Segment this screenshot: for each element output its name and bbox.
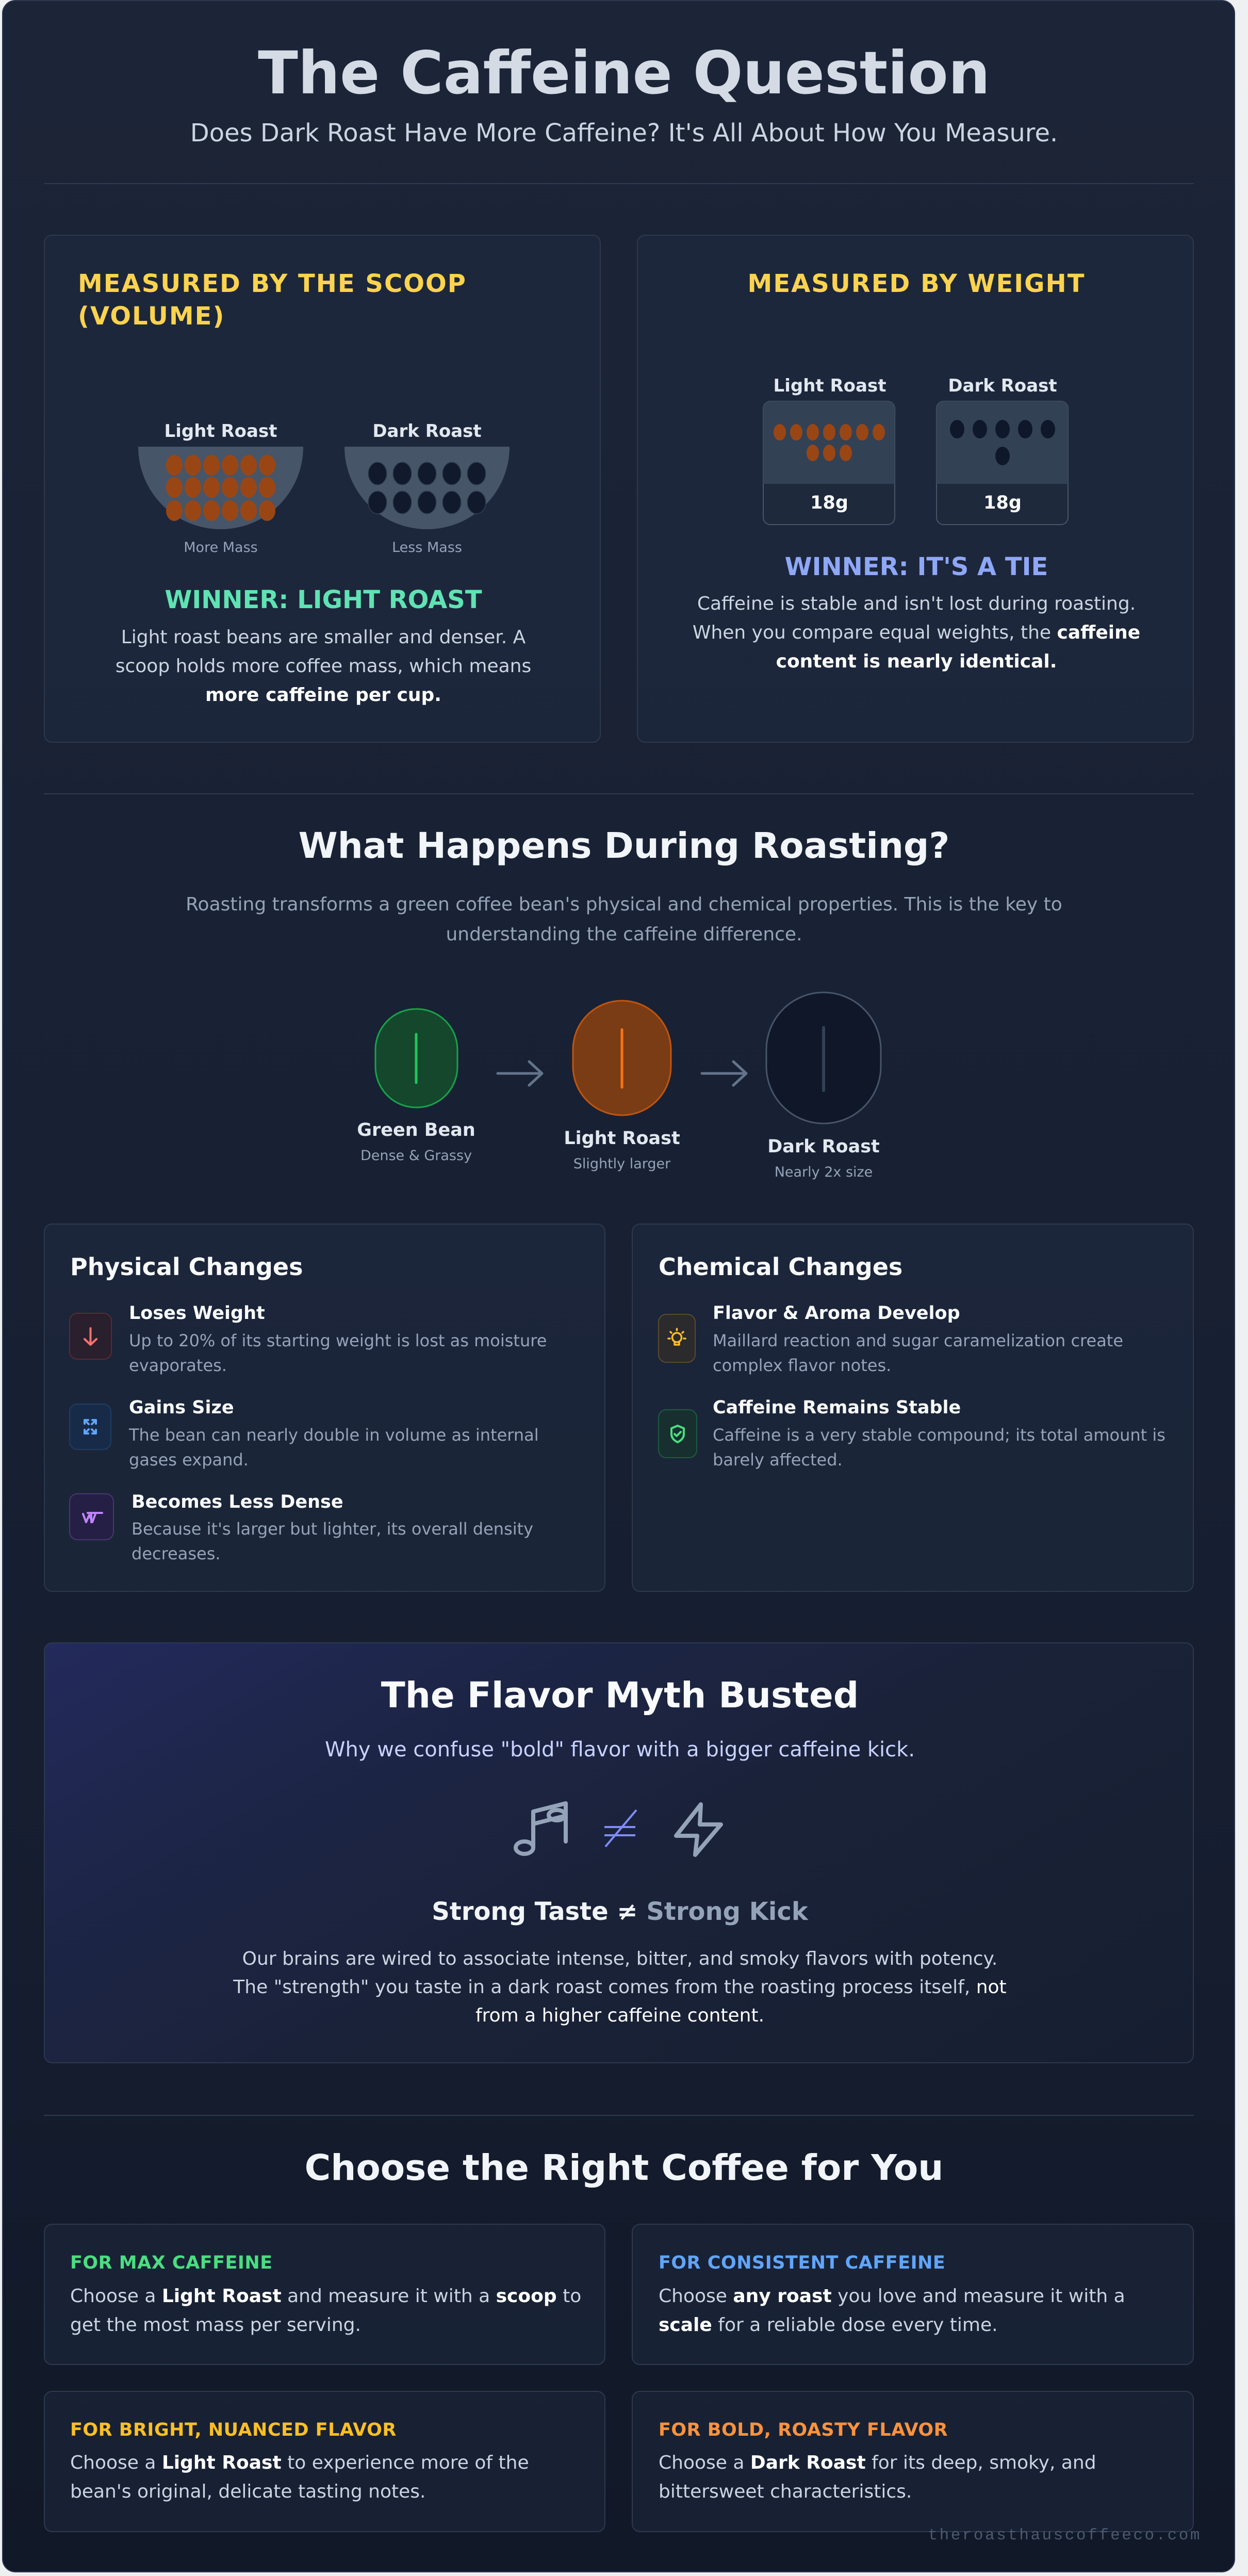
heading: weight: MEASURED BY WEIGHT bbox=[748, 269, 1085, 298]
card: bold flavor: FOR BOLD, ROASTY FLAVOR bbox=[659, 2420, 948, 2440]
weight boxes bbox=[763, 376, 1069, 525]
card: max caffeine bbox=[44, 2224, 605, 2365]
weight boxes: 18g bbox=[983, 493, 1022, 513]
panel: measured by scoop bbox=[44, 235, 601, 743]
arrow bbox=[498, 1062, 542, 1085]
arrow bbox=[702, 1062, 746, 1085]
scoop illustration: Less Mass bbox=[392, 540, 462, 556]
icon: shield bbox=[658, 1409, 697, 1458]
item: caffeine stable bbox=[658, 1397, 1165, 1470]
title: The Caffeine Question bbox=[258, 39, 990, 107]
item: flavor & aroma: Maillard reaction and sugar caramelization create complex flavor notes. bbox=[713, 1331, 1123, 1375]
icon: not equal bbox=[604, 1810, 636, 1847]
explanation: Our brains are wired to associate intense, bitter, and smoky flavors with potency. bbox=[242, 1948, 997, 1969]
explanation text: Caffeine is stable and isn't lost during roasting. When you compare equal weights, the caffeine content is nearly identical. bbox=[693, 593, 1140, 672]
light roast bean: Slightly larger bbox=[573, 1156, 671, 1172]
winner: light roast: WINNER: LIGHT ROAST bbox=[165, 585, 482, 614]
explanation text: Light roast beans are smaller and denser. A scoop holds more coffee mass, which means more caffeine per cup. bbox=[116, 627, 531, 706]
weight boxes: Light Roast bbox=[774, 376, 886, 396]
winner: tie: WINNER: IT'S A TIE bbox=[785, 552, 1048, 581]
card: bold flavor: Choose a Dark Roast for its deep, smoky, and bittersweet characteristics. bbox=[659, 2452, 1096, 2502]
heading: Chemical Changes bbox=[659, 1253, 902, 1281]
light roast bean bbox=[564, 1001, 680, 1172]
panel: physical changes bbox=[44, 1224, 605, 1592]
dark roast bean: Dark Roast bbox=[767, 1136, 880, 1157]
panel: chemical changes bbox=[632, 1224, 1194, 1592]
light roast bean: Light Roast bbox=[564, 1128, 680, 1149]
item: loses weight: Loses Weight bbox=[129, 1303, 265, 1324]
card: consistent caffeine: FOR CONSISTENT CAFFEINE bbox=[659, 2253, 945, 2273]
scoop illustration: More Mass bbox=[184, 540, 258, 556]
item: gains size: The bean can nearly double in volume as internal gases expand. bbox=[129, 1425, 539, 1470]
card: max caffeine: Choose a Light Roast and measure it with a scoop to get the most mass per serving. bbox=[70, 2286, 581, 2336]
panel: measured by weight bbox=[637, 235, 1194, 743]
footer url: theroasthauscoffeeco.com bbox=[928, 2526, 1202, 2545]
icon: music note bbox=[516, 1803, 566, 1854]
dark roast bean bbox=[766, 992, 881, 1180]
heading: choose: Choose the Right Coffee for You bbox=[305, 2147, 943, 2189]
heading: Physical Changes bbox=[70, 1253, 303, 1281]
scoop illustration bbox=[138, 421, 510, 556]
subtitle: Does Dark Roast Have More Caffeine? It's All About How You Measure. bbox=[190, 119, 1058, 148]
bean transformation diagram bbox=[357, 991, 882, 1180]
icon: arrow down bbox=[69, 1313, 112, 1360]
card: consistent caffeine bbox=[632, 2224, 1194, 2365]
item: caffeine stable: Caffeine is a very stable compound; its total amount is barely affected. bbox=[713, 1425, 1165, 1470]
roasting intro text: Roasting transforms a green coffee bean's physical and chemical properties. This is the key to understanding the caffeine difference. bbox=[186, 894, 1062, 945]
panel: flavor myth bbox=[44, 1642, 1194, 2063]
item: less dense: Becomes Less Dense bbox=[132, 1492, 343, 1512]
item: gains size: Gains Size bbox=[129, 1397, 234, 1418]
subheading: Why we confuse "bold" flavor with a bigger caffeine kick. bbox=[325, 1738, 915, 1762]
icons: taste not equal kick bbox=[514, 1801, 723, 1857]
icon: lightning bbox=[676, 1804, 721, 1855]
card: bright flavor bbox=[44, 2391, 605, 2532]
item: less dense bbox=[69, 1492, 533, 1563]
explanation: The "strength" you taste in a dark roast comes from the roasting process itself, not bbox=[233, 1977, 1007, 1998]
heading: scoop: MEASURED BY THE SCOOP (VOLUME) bbox=[78, 269, 467, 331]
scoop illustration: Dark Roast bbox=[372, 421, 482, 442]
green bean: Dense & Grassy bbox=[360, 1148, 472, 1164]
green bean: Green Bean bbox=[357, 1120, 475, 1140]
icon: expand bbox=[69, 1404, 111, 1450]
icon: weight bbox=[69, 1493, 114, 1540]
explanation: from a higher caffeine content. bbox=[475, 2005, 764, 2026]
green bean bbox=[357, 1009, 475, 1164]
item: flavor & aroma bbox=[658, 1303, 1123, 1375]
item: gains size bbox=[69, 1397, 539, 1470]
card: bright flavor: Choose a Light Roast to experience more of the bean's original, delicate tasting notes. bbox=[70, 2452, 529, 2502]
card: bright flavor: FOR BRIGHT, NUANCED FLAVOR bbox=[70, 2420, 397, 2440]
item: flavor & aroma: Flavor & Aroma Develop bbox=[713, 1303, 960, 1324]
item: loses weight: Up to 20% of its starting weight is lost as moisture evaporates. bbox=[129, 1331, 547, 1375]
item: caffeine stable: Caffeine Remains Stable bbox=[713, 1397, 961, 1418]
item: loses weight bbox=[69, 1303, 547, 1375]
icon: lightbulb bbox=[658, 1314, 696, 1363]
scoop illustration: Light Roast bbox=[165, 421, 277, 442]
item: less dense: Because it's larger but lighter, its overall density decreases. bbox=[132, 1519, 533, 1563]
weight boxes: Dark Roast bbox=[948, 376, 1057, 396]
explanation bbox=[233, 1948, 1007, 2026]
weight boxes: 18g bbox=[810, 493, 848, 513]
heading: The Flavor Myth Busted bbox=[381, 1675, 859, 1716]
dark roast bean: Nearly 2x size bbox=[775, 1164, 873, 1180]
card: bold flavor bbox=[632, 2391, 1194, 2532]
heading: roasting: What Happens During Roasting? bbox=[299, 825, 949, 867]
tagline: Strong Taste ≠ Strong Kick bbox=[432, 1897, 808, 1926]
card: max caffeine: FOR MAX CAFFEINE bbox=[70, 2253, 273, 2273]
card: consistent caffeine: Choose any roast you love and measure it with a scale for a reliable dose every time. bbox=[659, 2286, 1125, 2336]
